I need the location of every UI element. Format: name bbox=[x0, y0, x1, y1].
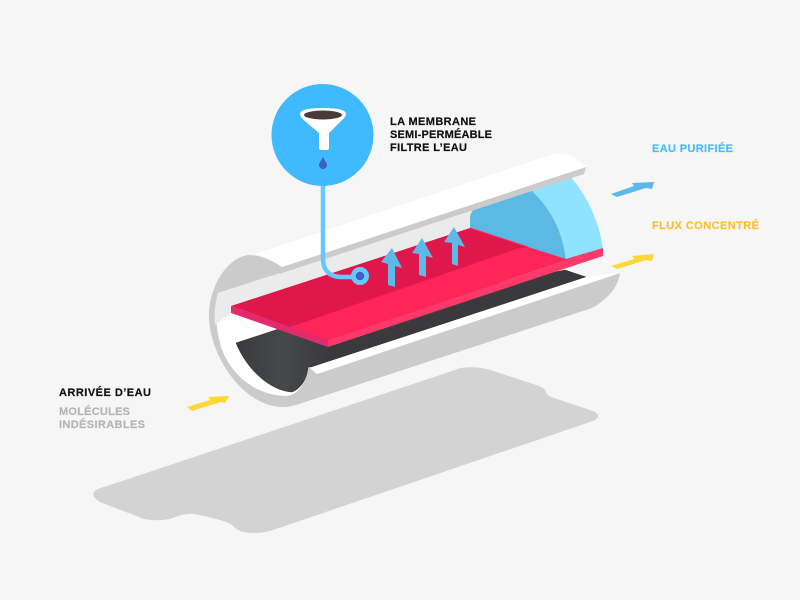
outer shell and lower half bbox=[209, 255, 620, 407]
purified water chamber bbox=[470, 172, 603, 260]
label: purified water: EAU PURIFIÉE bbox=[652, 142, 733, 155]
dark lower cavity bbox=[236, 270, 586, 392]
inner back wall bbox=[215, 210, 476, 325]
shell edge bbox=[279, 167, 586, 274]
label: water inlet: ARRIVÉE D’EAU bbox=[59, 386, 151, 399]
funnel contents bbox=[304, 110, 342, 120]
connector line from icon to membrane bbox=[323, 180, 369, 285]
label: unwanted molecules: INDÉSIRABLES bbox=[59, 418, 145, 431]
water drop bbox=[319, 157, 327, 169]
label: membrane bbox=[390, 116, 492, 154]
funnel bbox=[300, 108, 346, 150]
arrow: purified water bbox=[611, 182, 654, 197]
dark blue section bbox=[470, 186, 566, 260]
membrane rear highlight bbox=[470, 228, 528, 247]
arrow: water inlet bbox=[187, 396, 229, 411]
membrane right edge bbox=[328, 248, 603, 347]
membrane back fold bbox=[231, 228, 530, 327]
arrow 1 bbox=[381, 248, 402, 287]
arrow 3 bbox=[444, 227, 465, 266]
icon: funnel in blue circle bbox=[272, 84, 374, 186]
label: unwanted molecules bbox=[59, 405, 145, 431]
label: membrane: SEMI-PERMÉABLE bbox=[390, 128, 492, 141]
membrane front fold bbox=[290, 247, 603, 340]
membrane bbox=[231, 228, 603, 347]
shell top bbox=[255, 154, 586, 267]
label: membrane: FILTRE L’EAU bbox=[390, 142, 467, 154]
upper shell bbox=[255, 154, 586, 274]
tube bbox=[209, 210, 620, 407]
label: concentrate: FLUX CONCENTRÉ bbox=[652, 219, 759, 232]
arrows up through membrane bbox=[381, 227, 465, 287]
tube interior bbox=[216, 212, 586, 396]
white lower lip bbox=[310, 273, 620, 374]
arrow: concentrate bbox=[611, 254, 654, 269]
tube shadow bbox=[93, 367, 599, 533]
membrane front edge bbox=[231, 306, 328, 347]
label: unwanted molecules: MOLÉCULES bbox=[59, 405, 130, 418]
label: membrane: LA MEMBRANE bbox=[390, 116, 476, 128]
light blue section bbox=[530, 172, 603, 260]
arrow 2 bbox=[412, 238, 433, 277]
